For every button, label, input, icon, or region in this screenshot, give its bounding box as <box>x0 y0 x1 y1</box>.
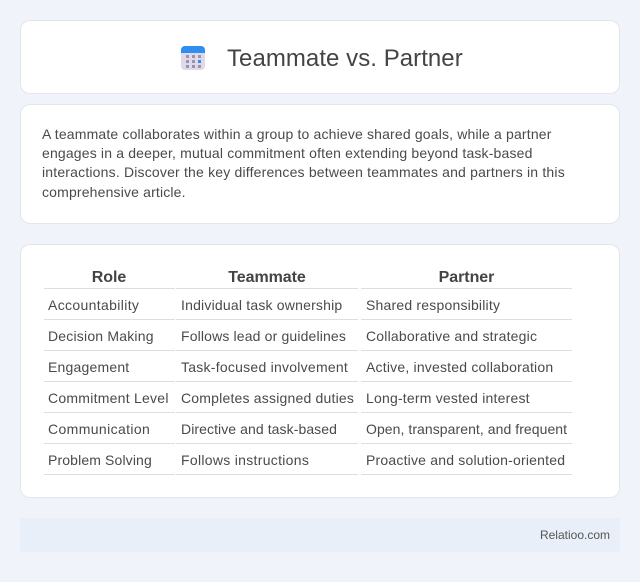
footer credit: Relatioo.com <box>540 528 610 542</box>
row: Communication: Communication <box>48 421 150 437</box>
icon: calendar <box>181 46 205 70</box>
row: Engagement <box>44 359 572 382</box>
text block: introduction: interactions. Discover the key differences between teammates and partners in this <box>42 164 565 180</box>
row: Communication: Directive and task-based <box>181 421 337 437</box>
row: Decision Making: Decision Making <box>48 328 154 344</box>
text block: introduction: comprehensive article. <box>42 184 186 200</box>
table header <box>44 269 572 289</box>
panel: introduction <box>20 104 620 224</box>
text block: introduction: engages in a deeper, mutual commitment often extending beyond task-based <box>42 145 533 161</box>
row: Decision Making: Collaborative and strategic <box>366 328 537 344</box>
text block: introduction: A teammate collaborates within a group to achieve shared goals, while a partner <box>42 126 552 142</box>
table header: Role <box>92 269 126 286</box>
row: Accountability <box>44 297 572 320</box>
row: Commitment Level: Completes assigned duties <box>181 390 354 406</box>
row: Commitment Level <box>44 390 572 413</box>
row: Problem Solving: Follows instructions <box>181 452 309 468</box>
table header: Teammate <box>228 269 306 286</box>
row: Communication: Open, transparent, and frequent <box>366 421 567 437</box>
row: Engagement: Active, invested collaboration <box>366 359 553 375</box>
table header: Partner <box>439 269 494 286</box>
row: Problem Solving <box>44 452 572 475</box>
row: Accountability: Individual task ownership <box>181 297 342 313</box>
footer <box>20 518 620 552</box>
panel: comparison table <box>20 244 620 498</box>
row: Commitment Level: Long-term vested interest <box>366 390 530 406</box>
panel: header <box>20 20 620 94</box>
row: Engagement: Task-focused involvement <box>181 359 348 375</box>
row: Accountability: Accountability <box>48 297 139 313</box>
row: Decision Making: Follows lead or guidelines <box>181 328 346 344</box>
row: Engagement: Engagement <box>48 359 129 375</box>
row: Commitment Level: Commitment Level <box>48 390 169 406</box>
title: Teammate vs. Partner <box>227 45 463 72</box>
text block: introduction <box>42 126 565 200</box>
row: Accountability: Shared responsibility <box>366 297 500 313</box>
row: Decision Making <box>44 328 572 351</box>
row: Communication <box>44 421 572 444</box>
row: Problem Solving: Problem Solving <box>48 452 152 468</box>
row: Problem Solving: Proactive and solution-oriented <box>366 452 565 468</box>
